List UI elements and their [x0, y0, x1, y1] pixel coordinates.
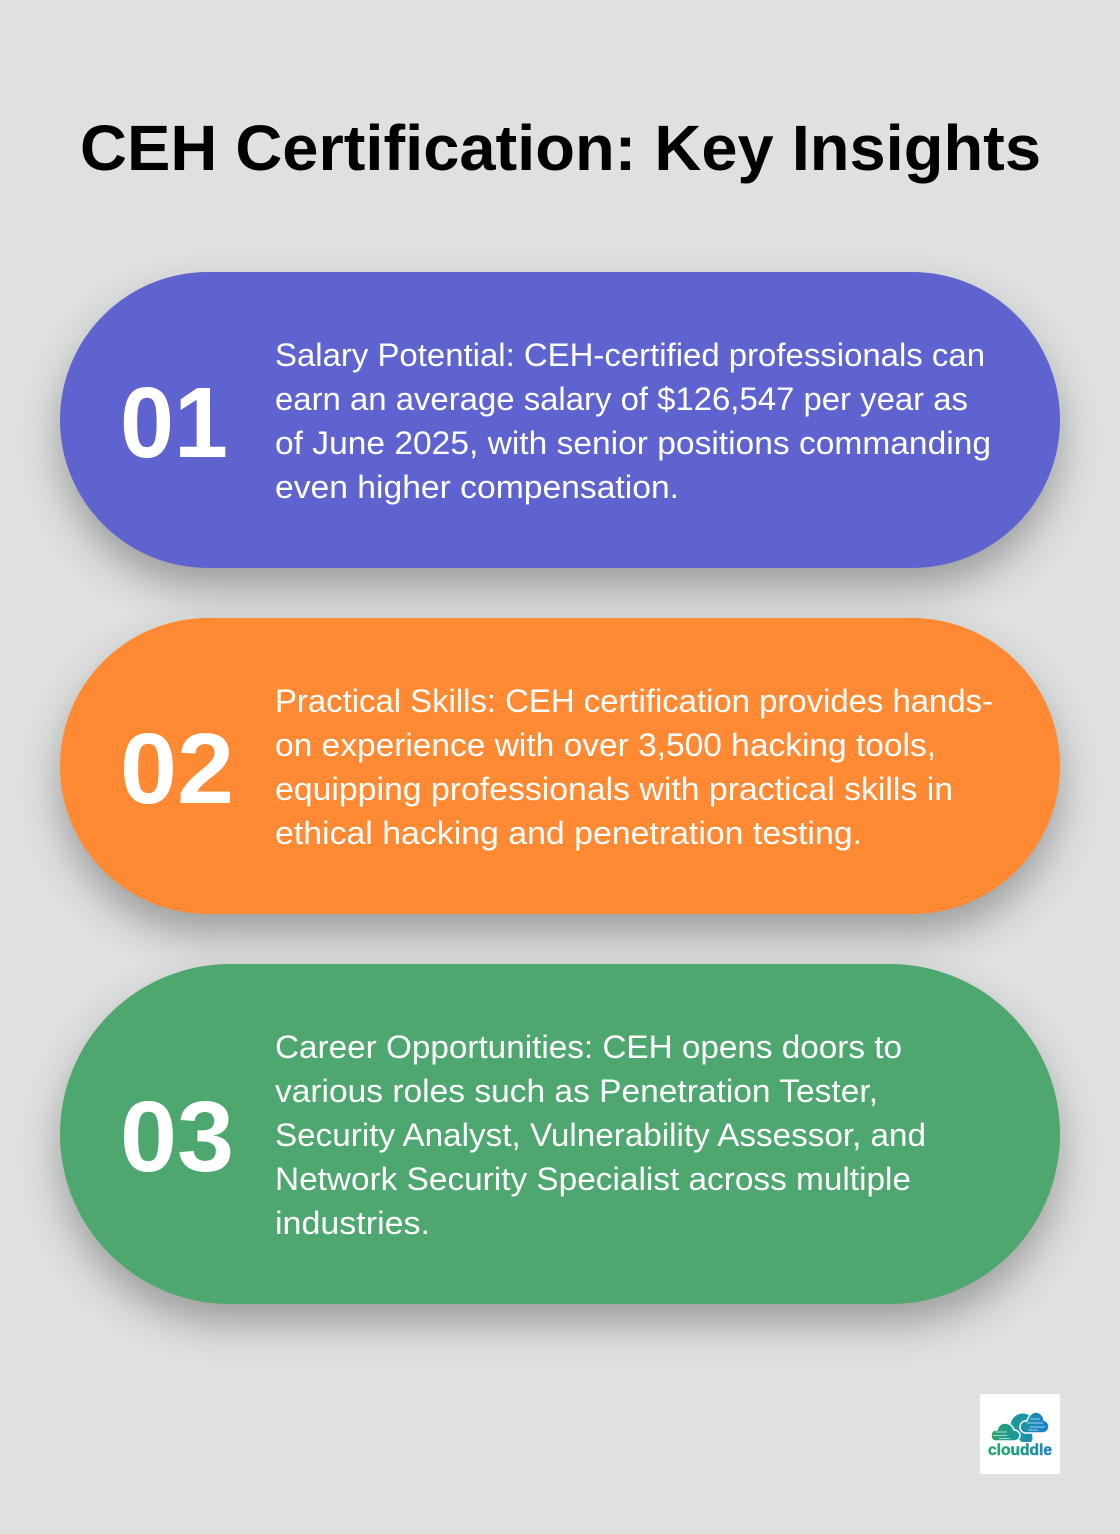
text: career opportunities — [275, 1029, 926, 1241]
number 01: 01 — [120, 367, 228, 479]
text: salary potential — [275, 337, 991, 505]
text: career opportunities: Career Opportunities: CEH opens doors to — [275, 1029, 902, 1065]
text: practical skills — [275, 683, 993, 851]
text: practical skills: on experience with over 3,500 hacking tools, — [275, 727, 936, 763]
text: practical skills: Practical Skills: CEH certification provides hands- — [275, 683, 993, 719]
text: career opportunities: Security Analyst, Vulnerability Assessor, and — [275, 1117, 926, 1153]
panel: salary potential — [60, 272, 1060, 568]
text: salary potential: of June 2025, with senior positions commanding — [275, 425, 991, 461]
text: career opportunities: various roles such as Penetration Tester, — [275, 1073, 878, 1109]
icon: clouds — [991, 1412, 1049, 1442]
text: career opportunities: Network Security Specialist across multiple — [275, 1161, 911, 1197]
text: salary potential: even higher compensation. — [275, 469, 679, 505]
text: practical skills: equipping professionals with practical skills in — [275, 771, 953, 807]
number 02: 02 — [120, 713, 234, 825]
logo: clouddle — [980, 1394, 1060, 1474]
text: career opportunities: industries. — [275, 1205, 430, 1241]
text: salary potential: earn an average salary of $126,547 per year as — [275, 381, 968, 417]
panel: practical skills — [60, 618, 1060, 914]
text: practical skills: ethical hacking and penetration testing. — [275, 815, 862, 851]
number 03: 03 — [120, 1081, 234, 1193]
text: salary potential: Salary Potential: CEH-certified professionals can — [275, 337, 985, 373]
logo wordmark: clouddle — [988, 1442, 1052, 1459]
panel: career opportunities — [60, 964, 1060, 1304]
title: CEH Certification: Key Insights — [80, 112, 1041, 184]
